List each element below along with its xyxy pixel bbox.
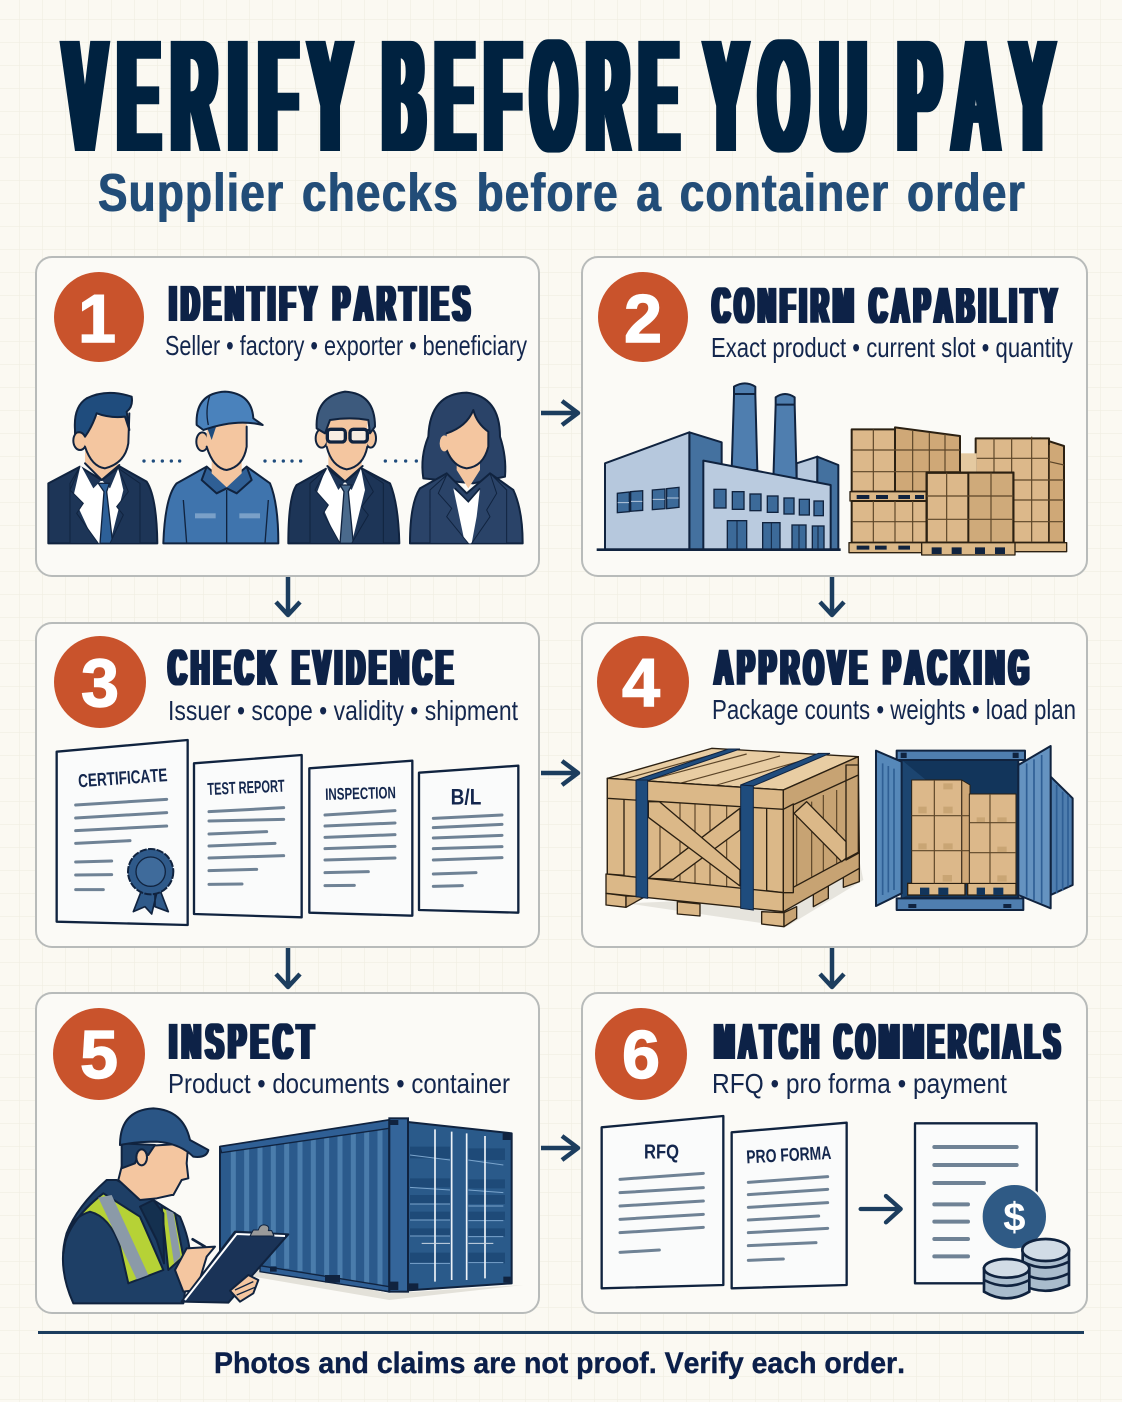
- document: inspection: INSPECTION: [325, 783, 396, 804]
- open container with cartons: [876, 746, 1073, 910]
- number badge 5: 5: [80, 1017, 118, 1093]
- illustration: documents and payment: [602, 1116, 1069, 1298]
- arrow: to payment: [861, 1196, 901, 1222]
- document: RFQ: RFQ: [644, 1141, 679, 1163]
- document: inspection: [309, 761, 412, 916]
- person: exporter: [288, 392, 399, 543]
- heading: inspect: INSPECT: [170, 1013, 318, 1070]
- panel 4: approve packing: [582, 623, 1087, 947]
- person: seller: [48, 393, 157, 543]
- footer note: Photos and claims are not proof. Verify each order.: [214, 1347, 905, 1380]
- document: test report: TEST REPORT: [207, 776, 285, 799]
- panel 3: check evidence: [36, 623, 539, 947]
- arrow: step 5 to 6: [541, 1136, 578, 1160]
- arrow: step 1 to 3: [276, 577, 300, 615]
- arrow: step 4 to 6: [820, 948, 844, 987]
- panel 2: confirm capability: [582, 257, 1087, 576]
- document: pro forma: PRO FORMA: [746, 1142, 832, 1167]
- document: certificate: CERTIFICATE: [77, 764, 168, 791]
- subheading: parties list: Seller • factory • exporter • beneficiary: [165, 330, 527, 361]
- icon: dollar coin: $: [1003, 1196, 1025, 1240]
- illustration: four people: [48, 392, 523, 543]
- number badge 1: 1: [78, 281, 116, 357]
- panel 1: identify parties: [36, 257, 539, 576]
- icon: seal: [128, 849, 173, 914]
- wooden crate: [606, 748, 863, 927]
- title: VERIFY: [64, 6, 364, 185]
- document: certificate: [57, 740, 188, 925]
- panel 1: identify parties: IDENTIFY PARTIES: [170, 275, 474, 332]
- number badge 5: [53, 1008, 145, 1100]
- illustration: crate and container: [606, 746, 1073, 927]
- person: factory worker: [163, 392, 278, 543]
- panel 6: match commercials: [582, 993, 1087, 1313]
- number badge 3: 3: [81, 645, 119, 721]
- number badge 3: [54, 636, 146, 728]
- number badge 6: 6: [622, 1017, 660, 1093]
- document: RFQ: [602, 1116, 723, 1288]
- arrow: step 2 to 4: [820, 577, 844, 615]
- connector dots: [142, 459, 418, 463]
- document: test report: [194, 755, 302, 917]
- number badge 1: [54, 272, 144, 362]
- illustration: four documents: [57, 740, 518, 925]
- number badge 4: 4: [622, 645, 660, 721]
- number badge 2: [598, 272, 688, 362]
- footer rule: [38, 1331, 1084, 1334]
- icon: dollar coin: [982, 1184, 1047, 1249]
- illustration: inspector and container: [63, 1108, 523, 1303]
- icon: coin stacks: [984, 1239, 1069, 1298]
- stacked cartons on pallets: [849, 427, 1067, 555]
- inspector with clipboard: [63, 1108, 288, 1303]
- subheading: evidence list: Issuer • scope • validity • shipment: [168, 695, 518, 726]
- arrow: step 3 to 5: [276, 948, 300, 987]
- number badge 6: [595, 1008, 687, 1100]
- panel 5: inspect: [36, 993, 539, 1313]
- document: bill of lading: [419, 766, 518, 913]
- shipping container: [220, 1118, 523, 1300]
- number badge 4: [597, 636, 689, 728]
- factory: [597, 383, 841, 550]
- illustration: factory and pallets: [597, 383, 1067, 555]
- panel 3: check evidence: CHECK EVIDENCE: [168, 639, 458, 696]
- person: beneficiary: [410, 393, 523, 543]
- arrow: step 1 to 2: [541, 401, 578, 425]
- arrow: step 3 to 4: [541, 761, 578, 785]
- document: pro forma: [732, 1123, 847, 1288]
- subheading: inspection items: Product • documents • container: [168, 1068, 510, 1099]
- number badge 2: 2: [624, 281, 662, 357]
- document: payment: [915, 1123, 1069, 1298]
- subheading: commercial items: RFQ • pro forma • payment: [712, 1068, 1007, 1099]
- document: bill of lading: B/L: [451, 784, 481, 809]
